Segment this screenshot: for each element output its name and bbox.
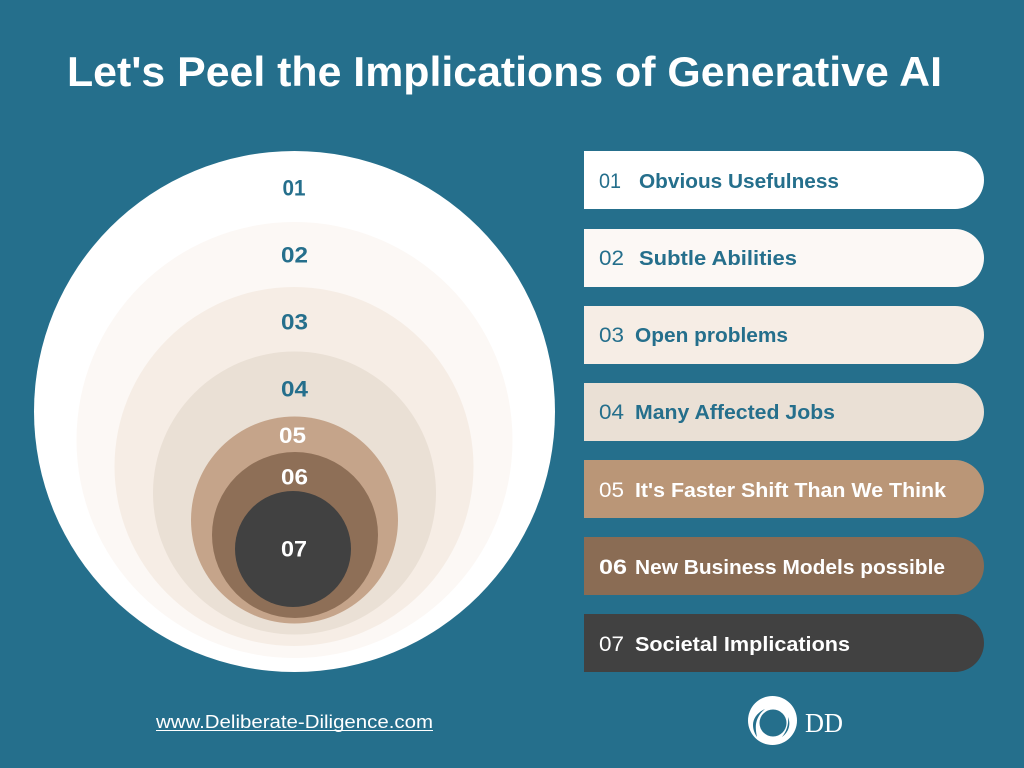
layer 02 circle [76,222,512,658]
item 04: 04 [599,401,624,424]
item 07: 07 [599,633,624,656]
item 05: 05 [599,479,624,502]
nested circles diagram [34,151,555,672]
item 06: New Business Models possible [635,557,945,579]
item 03: Open problems [635,325,788,347]
logo text: DD [805,708,843,738]
logo [748,696,843,745]
item 05: It's Faster Shift Than We Think [635,480,947,502]
layer 02 circle: 02 [281,242,308,268]
item 04: Many Affected Jobs [635,402,835,424]
layer 07 circle: 07 [281,536,307,562]
layer 07 circle [235,491,351,607]
layer 05 circle: 05 [279,423,306,448]
layer 01 circle: 01 [282,176,306,200]
item 06 [584,537,984,595]
item 06: 06 [599,556,627,579]
item 01: 01 [599,170,621,193]
item 07 [584,614,984,672]
layer 06 circle [212,452,378,618]
item 02: Subtle Abilities [639,248,797,270]
item 03 [584,306,984,364]
layer 03 circle [114,287,474,646]
icon: ring [748,696,797,745]
layer 04 circle: 04 [281,376,309,402]
item 07: Societal Implications [635,634,850,656]
layer 04 circle [153,352,436,634]
website link: www.Deliberate-Diligence.com [155,712,433,732]
layer 03 circle: 03 [281,310,308,334]
item 03: 03 [599,324,624,347]
list of implications [584,151,984,672]
item 02: 02 [599,247,624,270]
item 04 [584,383,984,441]
item 05 [584,460,984,518]
item 01 [584,151,984,209]
item 01: Obvious Usefulness [639,171,839,193]
layer 06 circle: 06 [281,464,308,490]
item 02 [584,229,984,287]
title: Let's Peel the Implications of Generative AI [67,48,942,95]
layer 05 circle [191,416,398,624]
